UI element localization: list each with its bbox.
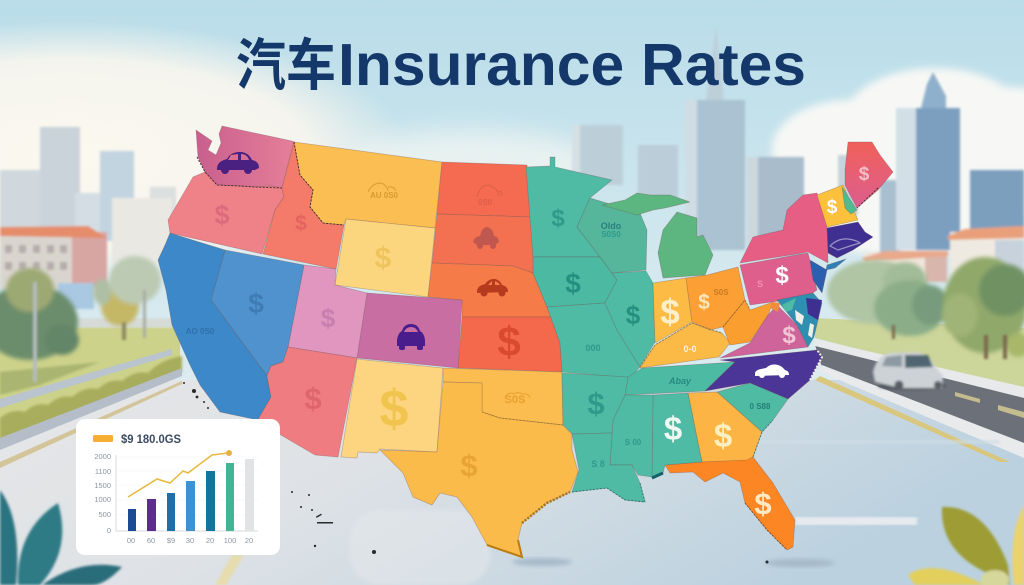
state: Kentucky bbox=[640, 323, 730, 368]
state: Pennsylvania bbox=[740, 253, 817, 305]
car icon: Massachusetts bbox=[830, 239, 860, 250]
state: Wisconsin bbox=[577, 198, 647, 273]
state: South Carolina bbox=[717, 383, 788, 432]
car icon: Colorado bbox=[397, 324, 425, 350]
shadows under Texas and Florida bbox=[512, 558, 835, 567]
dollar icon: Utah: $ bbox=[321, 303, 336, 333]
dollar sign icons on states bbox=[214, 164, 870, 521]
state: Indiana bbox=[653, 278, 692, 343]
state: Missouri bbox=[547, 303, 640, 378]
state: Virginia bbox=[720, 305, 808, 358]
state: Nebraska bbox=[428, 263, 551, 317]
dollar icon: Arkansas: $ bbox=[587, 386, 605, 421]
chart y-axis labels: 500 bbox=[98, 510, 111, 519]
state: Michigan upper bbox=[602, 193, 690, 215]
state: New Mexico bbox=[341, 359, 443, 458]
chart x-axis labels: 30 bbox=[186, 536, 194, 545]
chart x-axis labels: 100 bbox=[224, 536, 236, 545]
dollar icon: Kansas: $ bbox=[497, 318, 521, 365]
state: California bbox=[158, 233, 271, 420]
chart y-axis labels bbox=[94, 452, 111, 535]
chart value label: $9 180.0GS bbox=[121, 434, 181, 446]
dollar icon: Minnesota: $ bbox=[551, 205, 565, 232]
mini label: California: AO 0S0 bbox=[186, 327, 215, 336]
dollar icon: Idaho: $ bbox=[295, 212, 307, 235]
state: Oregon bbox=[168, 172, 284, 254]
mini label: Wisconsin: Oldo bbox=[601, 221, 622, 231]
state: New Jersey bbox=[810, 260, 827, 293]
chart y-axis labels: 0 bbox=[107, 526, 111, 535]
state: Nevada bbox=[211, 250, 304, 376]
small stylised labels on states bbox=[186, 191, 771, 469]
outline icon: Montana bbox=[368, 183, 396, 192]
mini label: Oklahoma: S0S bbox=[505, 394, 525, 406]
state: Iowa bbox=[533, 257, 617, 307]
Mid-Atlantic colour fragments bbox=[770, 298, 822, 338]
state: Montana bbox=[294, 142, 442, 228]
trend line bbox=[128, 450, 232, 497]
chart y-axis labels: 1000 bbox=[94, 495, 111, 504]
mini label: Kentucky: 0-0 bbox=[683, 344, 697, 354]
state: Georgia bbox=[688, 392, 762, 462]
chart y-axis labels: 1100 bbox=[95, 467, 111, 476]
dollar icon: Maine: $ bbox=[859, 164, 870, 185]
chart x-axis labels bbox=[127, 536, 253, 545]
state: Louisiana bbox=[572, 433, 645, 502]
state: Mid-Atlantic coast bbox=[777, 293, 822, 347]
state: Tennessee bbox=[625, 362, 735, 395]
state: Maine bbox=[845, 142, 893, 208]
state: Texas bbox=[380, 382, 578, 557]
chart x-axis labels: 60 bbox=[147, 536, 155, 545]
dollar icon: New Mexico: $ bbox=[380, 380, 409, 438]
mini label: Tennessee: Abay bbox=[668, 376, 692, 386]
dollar icon: Texas: $ bbox=[460, 448, 478, 483]
dollar icon: Florida: $ bbox=[754, 486, 772, 521]
outline icon: Oklahoma bbox=[505, 392, 530, 398]
state: Michigan lower bbox=[658, 212, 713, 278]
dollar icon: Alabama: $ bbox=[664, 410, 682, 447]
state: Minnesota bbox=[526, 157, 612, 257]
mini label: Ohio: S0S bbox=[713, 288, 729, 297]
state: South Dakota bbox=[432, 214, 533, 273]
specks of islands bbox=[183, 382, 768, 564]
state: Vermont and New Hampshire bbox=[817, 185, 858, 227]
chart x-axis labels: 20 bbox=[245, 536, 253, 545]
state: Kansas bbox=[458, 317, 562, 372]
dollar icon: Vermont: $ bbox=[827, 197, 838, 218]
foreground yellow leaves bbox=[908, 505, 1024, 585]
car icon: South Dakota bbox=[473, 227, 499, 249]
state: Florida bbox=[665, 457, 795, 550]
dollar icon: Wyoming: $ bbox=[375, 242, 392, 275]
car icon: Nebraska bbox=[477, 279, 508, 296]
state: Mississippi bbox=[610, 395, 653, 477]
chart y-axis labels: 1500 bbox=[94, 481, 111, 490]
title bbox=[236, 21, 806, 102]
title: Chinese part: 汽车 bbox=[236, 21, 336, 102]
legend swatch bbox=[93, 435, 113, 442]
dollar icon: Nevada: $ bbox=[248, 288, 264, 319]
dollar icon: Illinois: $ bbox=[626, 300, 641, 330]
dollar icon: Oregon: $ bbox=[214, 200, 230, 230]
state: North Dakota bbox=[437, 162, 532, 217]
state: North Carolina bbox=[705, 350, 822, 399]
state: Arkansas bbox=[562, 373, 628, 434]
mini label: Mississippi: S 00 bbox=[625, 438, 642, 447]
map of US states bbox=[158, 126, 893, 557]
dollar icon: Indiana: $ bbox=[660, 293, 680, 332]
foreground teal leaves bbox=[0, 490, 122, 585]
state: Oklahoma bbox=[443, 368, 563, 425]
dollar icon: Iowa: $ bbox=[565, 268, 581, 299]
state: Washington bbox=[196, 126, 294, 188]
state: Colorado bbox=[357, 293, 462, 368]
state: West Virginia bbox=[723, 300, 773, 345]
chart x-axis labels: 20 bbox=[206, 536, 214, 545]
state: New Hampshire accent bbox=[842, 187, 857, 214]
state: Ohio bbox=[686, 267, 745, 330]
car icon: Washington bbox=[217, 152, 259, 174]
state: Arizona bbox=[257, 347, 357, 457]
state: Utah bbox=[288, 265, 367, 358]
mini label: Wisconsin second line: S0S0 bbox=[601, 230, 621, 239]
title: English part: Insurance Rates bbox=[338, 32, 806, 98]
chart y-axis labels: 2000 bbox=[94, 452, 111, 461]
state: New York bbox=[740, 193, 828, 263]
mini label: South Carolina: 0 S88 bbox=[750, 402, 771, 411]
chart card bbox=[76, 419, 280, 555]
state: Long Island bbox=[826, 259, 846, 270]
dollar icon: Virginia: $ bbox=[782, 322, 796, 349]
state: Massachusetts bbox=[827, 222, 873, 258]
mini label: North Dakota: 0S0 bbox=[478, 198, 493, 207]
small outline icons bbox=[368, 183, 530, 398]
car icon: North Carolina bbox=[755, 364, 789, 378]
dollar icon: Pennsylvania: $ bbox=[775, 262, 789, 289]
car icons on states bbox=[217, 152, 860, 378]
state: Wyoming bbox=[335, 219, 435, 297]
state: Illinois bbox=[605, 271, 655, 367]
mini label: Louisiana: S 8 bbox=[591, 459, 605, 469]
state: Alabama bbox=[652, 393, 702, 478]
mini label: Missouri: 000 bbox=[585, 343, 601, 353]
chart axes bbox=[116, 455, 258, 531]
coastline detail strokes bbox=[197, 142, 878, 557]
outline icon: North Dakota bbox=[477, 185, 502, 197]
dollar icon: Arizona: $ bbox=[304, 381, 322, 416]
dollar icon: Georgia: $ bbox=[714, 417, 732, 454]
mini label: Pennsylvania: S bbox=[757, 279, 763, 289]
chart x-axis labels: 00 bbox=[127, 536, 135, 545]
state: Idaho bbox=[263, 142, 344, 269]
car on the road bbox=[873, 352, 946, 390]
dollar icon: Ohio: $ bbox=[698, 291, 710, 314]
chart x-axis labels: $9 bbox=[167, 536, 175, 545]
bar chart bbox=[128, 459, 254, 531]
mini label: Montana: AU 0S0 bbox=[370, 191, 399, 200]
